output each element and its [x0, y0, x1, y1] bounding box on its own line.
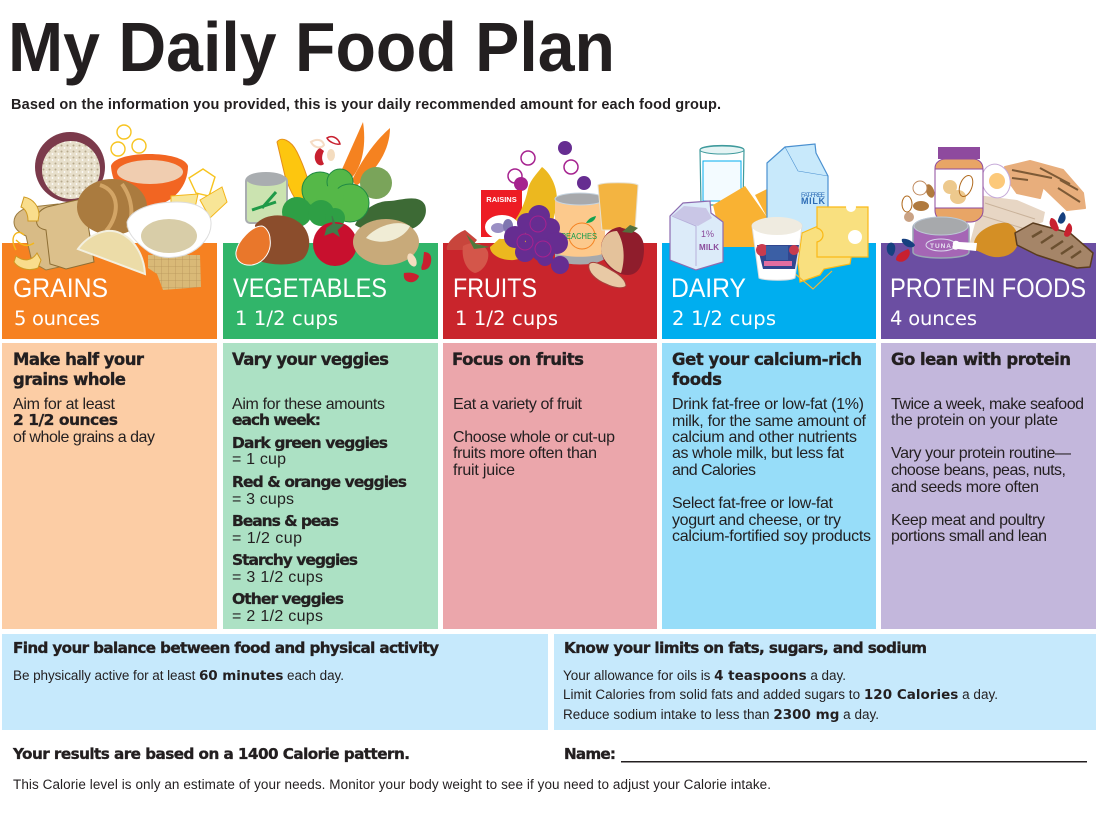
grains heading — [13, 350, 145, 389]
dairy heading: Get your calcium-rich — [672, 350, 862, 369]
dairy text: and Calories — [672, 462, 756, 479]
vegetables text: = 3 cups — [232, 491, 294, 508]
dairy text: yogurt and cheese, or try — [672, 512, 841, 529]
panel: grains — [2, 125, 227, 629]
grains label: GRAINS — [13, 273, 108, 303]
vegetables text: = 1/2 cup — [232, 530, 302, 547]
panel: vegetables — [223, 122, 438, 629]
fruits amount: 1 1/2 cups — [455, 307, 558, 330]
protein text: portions small and lean — [891, 528, 1047, 545]
vegetables text: Other veggies — [232, 590, 344, 608]
balance text: Be physically active for at least 60 minutes each day. — [13, 668, 344, 684]
vegetables food illustration — [236, 122, 431, 282]
panel: balance — [2, 634, 548, 730]
footnote: This Calorie level is only an estimate of your needs. Monitor your body weight to see if you need to adjust your Calorie intake. — [13, 777, 771, 792]
protein text: Vary your protein routine— — [891, 445, 1071, 462]
dairy heading — [672, 350, 862, 389]
protein heading: Go lean with protein — [891, 350, 1071, 369]
grains food illustration — [13, 125, 227, 290]
vegetables text: = 2 1/2 cups — [232, 608, 323, 625]
vegetables text: = 3 1/2 cups — [232, 569, 323, 586]
grains heading: Make half your — [13, 350, 145, 369]
vegetables text: Dark green veggies — [232, 434, 388, 452]
dairy text: Drink fat-free or low-fat (1%) — [672, 396, 864, 413]
grains text — [13, 396, 155, 446]
vegetables text: Beans & peas — [232, 512, 339, 530]
grains amount: 5 ounces — [14, 307, 100, 330]
grains text: 2 1/2 ounces — [13, 411, 118, 429]
panel: protein foods — [881, 147, 1096, 629]
dairy food illustration: FAT-FREE — [801, 192, 826, 199]
dairy label: DAIRY — [671, 273, 746, 303]
dairy text — [672, 396, 871, 545]
fruits food illustration — [447, 141, 644, 288]
vegetables text — [232, 396, 407, 625]
dairy food illustration: MILK — [699, 243, 719, 252]
protein food illustration: TUNA — [930, 243, 951, 250]
limits text — [563, 668, 998, 723]
limits heading: Know your limits on fats, sugars, and sodium — [564, 639, 927, 657]
vegetables text: Red & orange veggies — [232, 473, 407, 491]
protein text — [891, 396, 1084, 545]
results note: Your results are based on a 1400 Calorie pattern. — [12, 745, 410, 763]
protein text: Keep meat and poultry — [891, 512, 1045, 529]
protein text: Twice a week, make seafood — [891, 396, 1084, 413]
protein text: choose beans, peas, nuts, — [891, 462, 1066, 479]
limits text: Limit Calories from solid fats and added sugars to 120 Calories a day. — [563, 687, 998, 703]
panel: limits — [554, 634, 1096, 730]
dairy text: calcium-fortified soy products — [672, 528, 871, 545]
dairy food illustration — [670, 144, 868, 289]
vegetables heading: Vary your veggies — [232, 350, 389, 369]
dairy text: milk, for the same amount of — [672, 413, 867, 430]
protein amount: 4 ounces — [890, 307, 977, 330]
fruits label: FRUITS — [453, 273, 537, 303]
fruits text: fruits more often than — [453, 445, 597, 462]
fruits text: Choose whole or cut-up — [453, 429, 615, 446]
dairy food illustration: MILK — [801, 196, 826, 206]
panel: dairy — [662, 144, 876, 629]
grains text: Aim for at least — [13, 396, 116, 413]
grains heading: grains whole — [13, 370, 126, 389]
protein food illustration — [887, 147, 1093, 268]
vegetables amount: 1 1/2 cups — [235, 307, 338, 330]
title: My Daily Food Plan — [8, 8, 615, 86]
limits text: Your allowance for oils is 4 teaspoons a day. — [563, 668, 846, 684]
dairy text: as whole milk, but less fat — [672, 445, 845, 462]
fruits text — [453, 396, 615, 479]
limits text: Reduce sodium intake to less than 2300 mg a day. — [563, 707, 879, 723]
protein text: and seeds more often — [891, 479, 1039, 496]
fruits text: fruit juice — [453, 462, 515, 479]
dairy heading: foods — [672, 370, 722, 389]
vegetables text: Aim for these amounts — [232, 396, 385, 413]
protein text: the protein on your plate — [891, 412, 1058, 429]
fruits food illustration: PEACHES — [561, 231, 597, 241]
vegetables text: each week: — [232, 411, 321, 429]
vegetables text: = 1 cup — [232, 451, 286, 468]
vegetables text: Starchy veggies — [232, 551, 358, 569]
dairy text: calcium and other nutrients — [672, 429, 857, 446]
fruits heading: Focus on fruits — [452, 350, 584, 369]
subtitle: Based on the information you provided, this is your daily recommended amount for each food group. — [11, 97, 721, 113]
fruits food illustration: RAISINS — [486, 195, 517, 204]
dairy amount: 2 1/2 cups — [672, 307, 776, 330]
balance heading: Find your balance between food and physical activity — [13, 639, 439, 657]
grains text: of whole grains a day — [13, 429, 155, 446]
vegetables label: VEGETABLES — [233, 273, 387, 303]
panel: fruits — [443, 141, 657, 629]
dairy food illustration: 1% — [701, 229, 714, 239]
name field: Name: — [564, 745, 616, 763]
fruits text: Eat a variety of fruit — [453, 396, 583, 413]
dairy text: Select fat-free or low-fat — [672, 495, 834, 512]
